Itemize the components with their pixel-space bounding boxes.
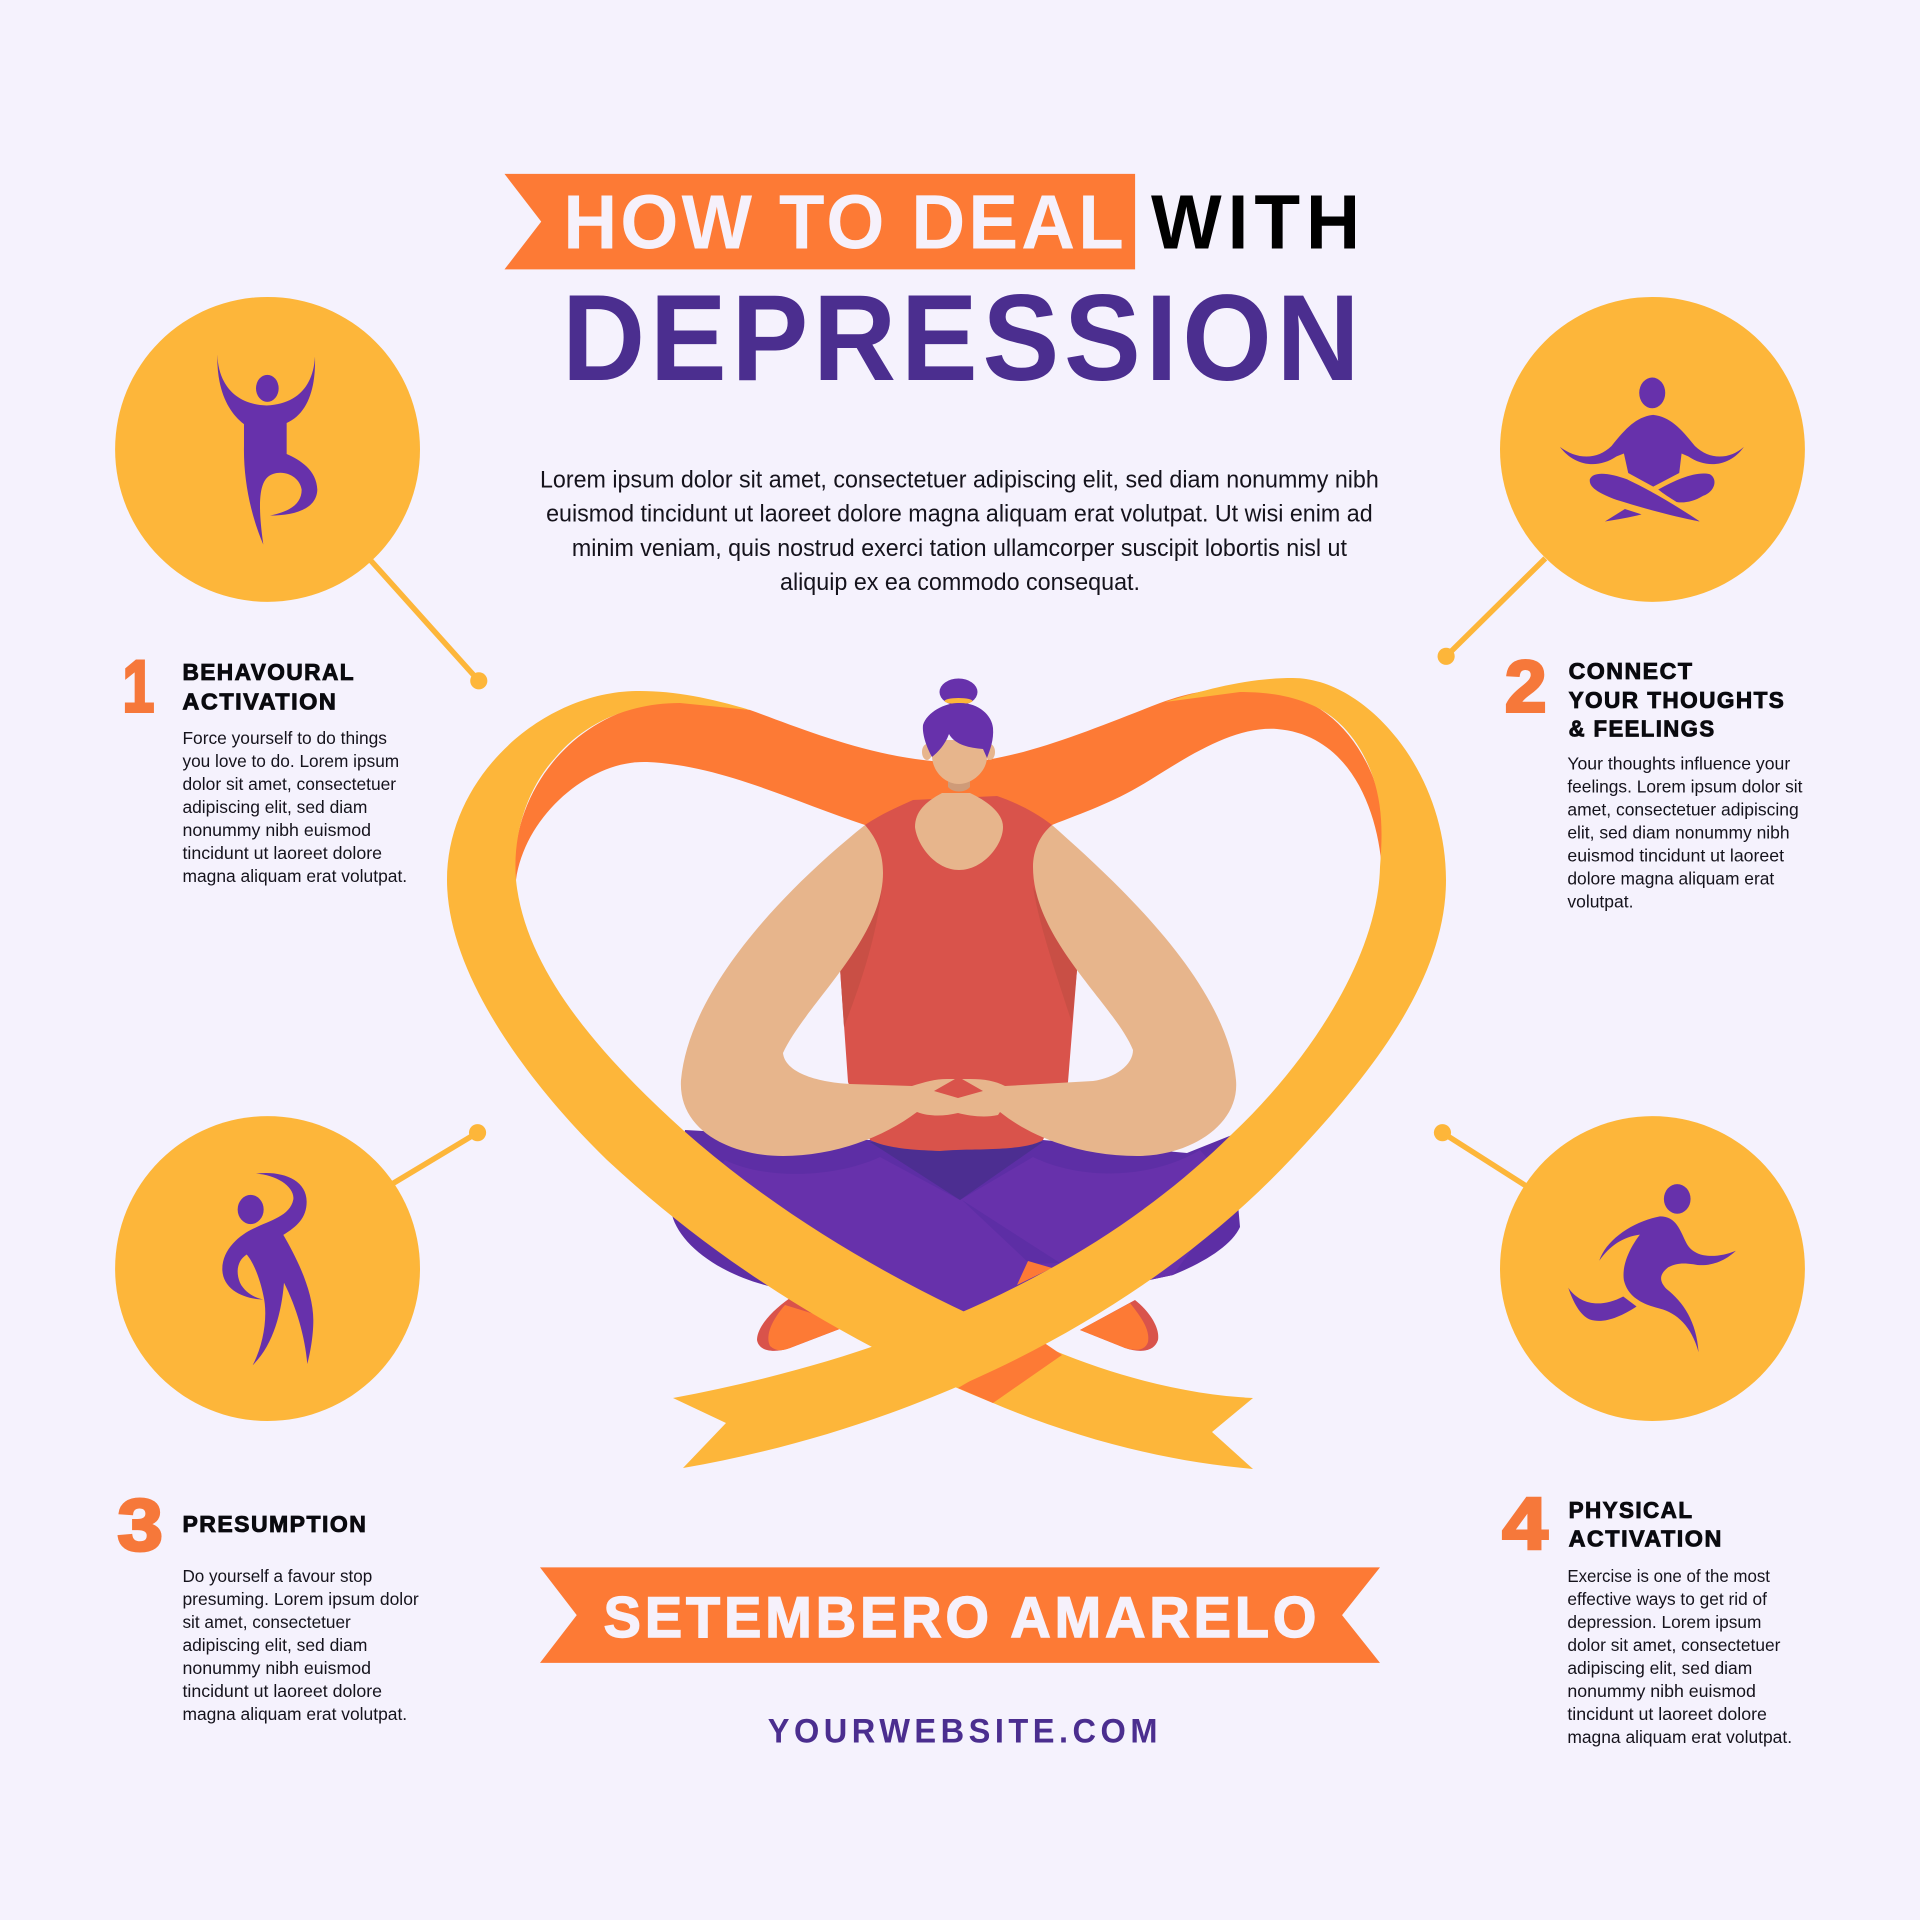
ribbon right band	[673, 678, 1446, 1468]
icon: meditating figure	[1560, 378, 1744, 521]
heading 2	[1569, 658, 1785, 742]
intro paragraph: minim veniam, quis nostrud exerci tation ullamcorper suscipit lobortis nisl ut	[572, 535, 1347, 562]
text 2: feelings. Lorem ipsum dolor sit	[1567, 777, 1802, 797]
text 4: depression. Lorem ipsum	[1567, 1612, 1761, 1632]
text 2: amet, consectetuer adipiscing	[1567, 800, 1799, 820]
title word with: WITH	[1151, 180, 1360, 266]
tank top	[840, 796, 1077, 1151]
icon: running figure	[1568, 1184, 1736, 1352]
bottom banner	[540, 1567, 1380, 1663]
connector 2	[1438, 558, 1545, 665]
text 4: tincidunt ut laoreet dolore	[1567, 1704, 1767, 1724]
circle 4	[1500, 1116, 1805, 1421]
text 1: tincidunt ut laoreet dolore	[182, 843, 382, 863]
ears	[922, 744, 932, 760]
intro paragraph	[540, 466, 1379, 596]
text 3: sit amet, consectetuer	[182, 1612, 351, 1632]
text 2: euismod tincidunt ut laoreet	[1567, 846, 1784, 866]
text 1: adipiscing elit, sed diam	[182, 797, 367, 817]
text 1: nonummy nibh euismod	[182, 820, 371, 840]
icon: tree pose figure	[217, 355, 317, 545]
banner ribbon	[540, 1567, 1380, 1663]
text 1	[182, 728, 407, 886]
text 2: Your thoughts influence your	[1567, 754, 1790, 774]
heading 3: PRESUMPTION	[182, 1511, 367, 1537]
text 2	[1567, 754, 1802, 912]
hair	[923, 703, 993, 758]
circle 2	[1500, 297, 1805, 602]
text 3: adipiscing elit, sed diam	[182, 1635, 367, 1655]
text 2: elit, sed diam nonummy nibh	[1567, 823, 1790, 843]
text 1: magna aliquam erat volutpat.	[182, 866, 407, 886]
left foot	[757, 1298, 850, 1351]
text 3	[182, 1566, 419, 1724]
panel 2: connect thoughts and feelings	[1438, 297, 1805, 912]
woman figure	[672, 679, 1240, 1351]
title line one highlighted: HOW TO DEAL	[563, 180, 1124, 266]
banner text: SETEMBERO AMARELO	[604, 1586, 1316, 1650]
title	[504, 174, 1360, 407]
hair tie	[945, 698, 973, 704]
circle 3	[115, 1116, 420, 1421]
heading 4: PHYSICAL	[1569, 1497, 1693, 1523]
shirt shadow left	[840, 873, 883, 1027]
central illustration: woman meditating in ribbon heart	[447, 678, 1446, 1469]
panel 1: behavioural activation	[115, 297, 487, 886]
heading 2: YOUR THOUGHTS	[1569, 687, 1785, 713]
hair bun	[940, 679, 978, 706]
connector 4	[1434, 1124, 1527, 1187]
text 3: Do yourself a favour stop	[182, 1566, 372, 1586]
text 3: presuming. Lorem ipsum dolor	[182, 1589, 419, 1609]
number 4: 4	[1502, 1482, 1548, 1565]
text 3: nonummy nibh euismod	[182, 1658, 371, 1678]
heading 1: BEHAVOURAL	[182, 659, 355, 685]
panel 4: physical activation	[1434, 1116, 1805, 1747]
trousers front	[700, 1150, 1235, 1320]
ribbon left band	[447, 691, 1253, 1469]
ribbon crossing shadow	[958, 1340, 1062, 1403]
text 4: dolor sit amet, consectetuer	[1567, 1635, 1780, 1655]
arms and hands	[681, 825, 1236, 1156]
connector 3	[392, 1124, 486, 1184]
neck	[948, 778, 970, 792]
text 4	[1567, 1566, 1792, 1747]
text 3: magna aliquam erat volutpat.	[182, 1704, 407, 1724]
text 4: adipiscing elit, sed diam	[1567, 1658, 1752, 1678]
ribbon back band	[515, 688, 1385, 885]
text 4: nonummy nibh euismod	[1567, 1681, 1756, 1701]
text 4: Exercise is one of the most	[1567, 1566, 1770, 1586]
heading 2: CONNECT	[1569, 658, 1693, 684]
text 2: volutpat.	[1567, 892, 1633, 912]
shirt shadow right	[1033, 887, 1077, 1023]
number 3: 3	[118, 1483, 163, 1566]
text 3: tincidunt ut laoreet dolore	[182, 1681, 382, 1701]
trousers back	[672, 1130, 1240, 1320]
intro paragraph: Lorem ipsum dolor sit amet, consectetuer adipiscing elit, sed diam nonummy nibh	[540, 466, 1379, 493]
neck and chest	[915, 793, 1003, 870]
text 1: Force yourself to do things	[182, 728, 387, 748]
heading 1: ACTIVATION	[182, 689, 337, 715]
circle 1	[115, 297, 420, 602]
panel 3: presumption	[115, 1116, 486, 1724]
upper foot	[1017, 1261, 1052, 1285]
text 4: effective ways to get rid of	[1567, 1589, 1767, 1609]
heading 4	[1569, 1497, 1723, 1552]
text 1: dolor sit amet, consectetuer	[182, 774, 396, 794]
icon: dancing figure	[222, 1173, 313, 1365]
number 2: 2	[1505, 644, 1547, 727]
heading 4: ACTIVATION	[1569, 1526, 1723, 1552]
intro paragraph: euismod tincidunt ut laoreet dolore magna aliquam erat volutpat. Ut wisi enim ad	[546, 501, 1373, 528]
face	[932, 740, 987, 784]
text 4: magna aliquam erat volutpat.	[1567, 1727, 1792, 1747]
website address: YOURWEBSITE.COM	[768, 1713, 1157, 1751]
heading 1	[182, 659, 355, 715]
title banner	[504, 174, 1135, 269]
text 1: you love to do. Lorem ipsum	[182, 751, 399, 771]
connector 1	[371, 561, 487, 689]
number 1: 1	[122, 644, 154, 727]
text 2: dolore magna aliquam erat	[1567, 869, 1774, 889]
trousers crotch shadow	[870, 1142, 1043, 1200]
intro paragraph: aliquip ex ea commodo consequat.	[780, 569, 1140, 596]
heading 2: & FEELINGS	[1569, 716, 1716, 742]
right foot	[1080, 1300, 1158, 1351]
title word depression: DEPRESSION	[562, 270, 1360, 407]
trouser fold	[962, 1200, 1060, 1264]
